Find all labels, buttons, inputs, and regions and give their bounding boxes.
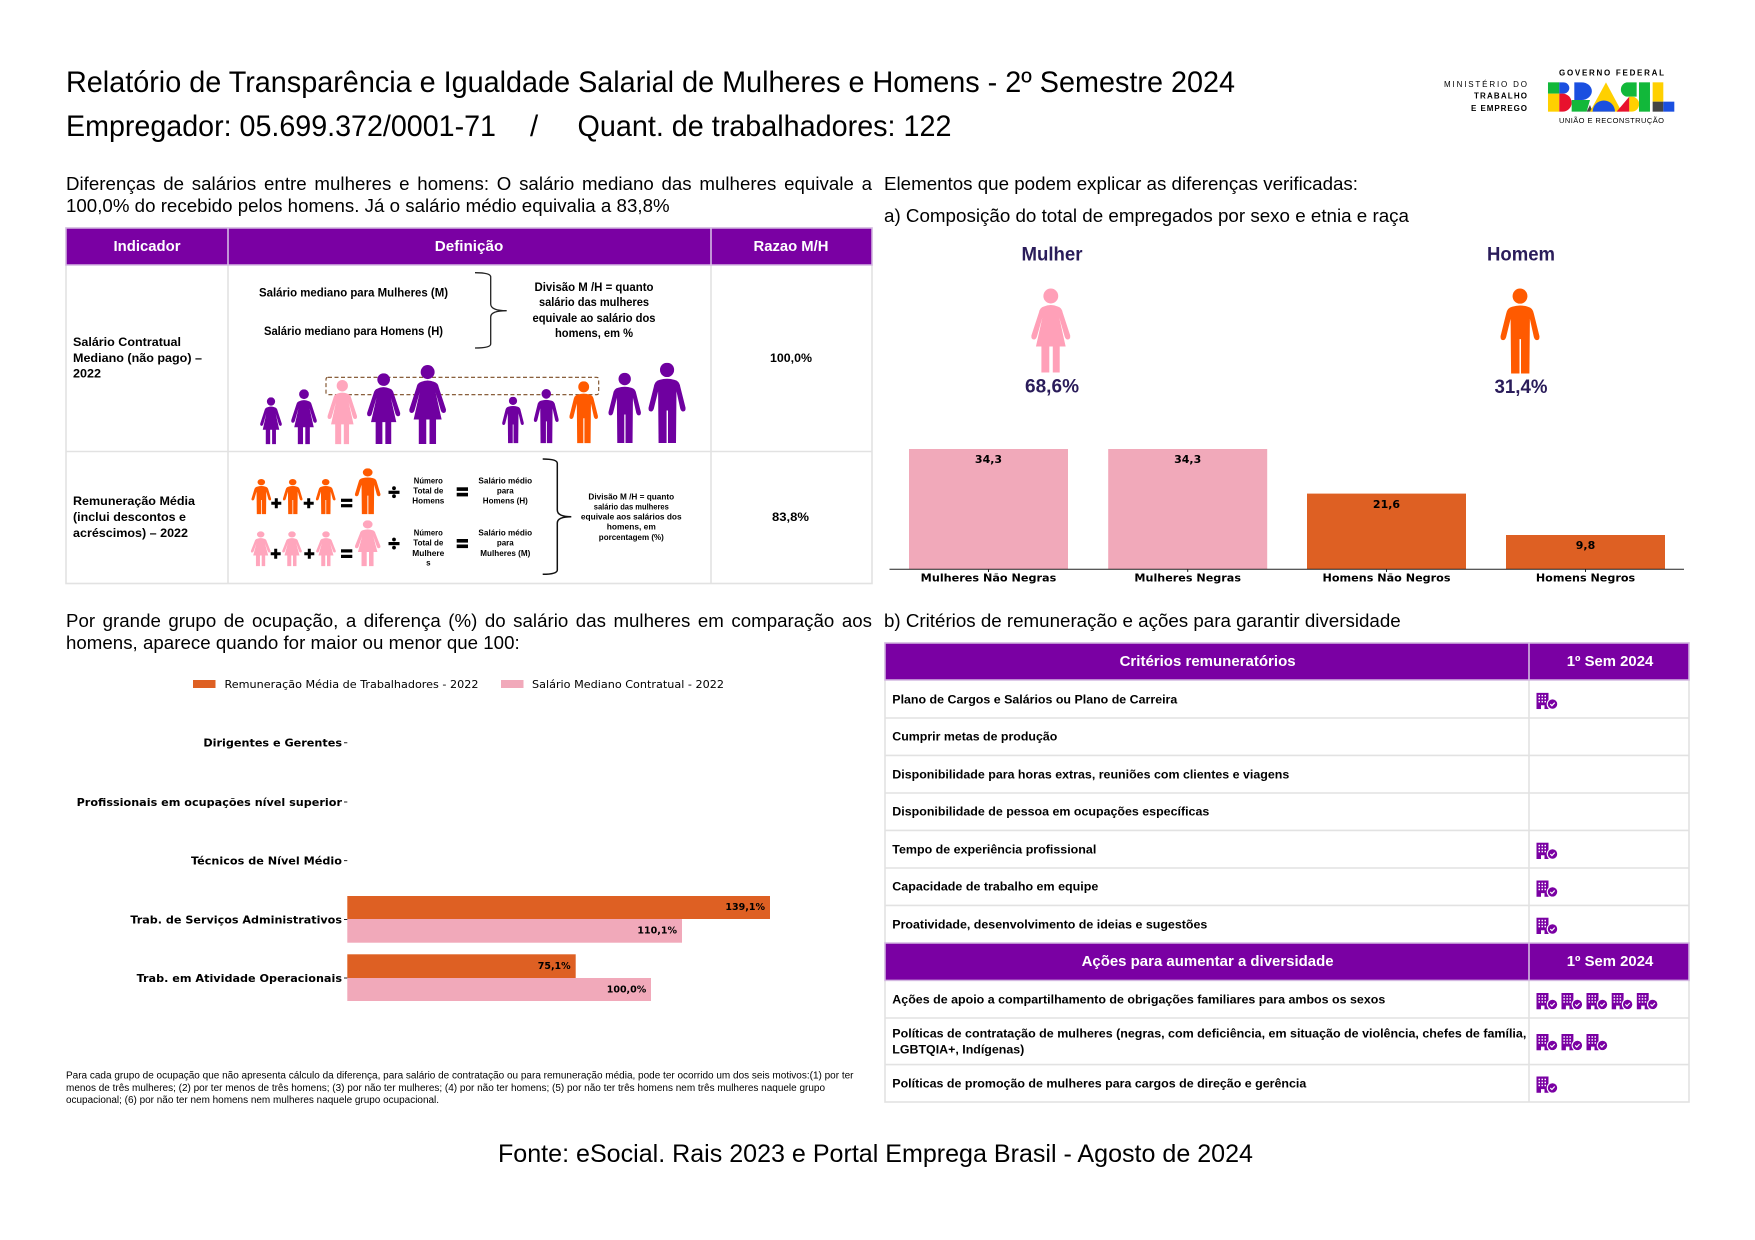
panel: critérios e ações table: Proatividade, desenvolvimento de ideias e sugestões: [892, 918, 1208, 932]
panel: indicator table: homens, em: [607, 523, 656, 532]
bar chart: composição por etnia e raça: 34,3: [975, 453, 1002, 466]
panel: critérios e ações table: Disponibilidade para horas extras, reuniões com clientes e viagens: [892, 768, 1290, 782]
legend: Salário Mediano Contratual - 2022: [532, 679, 724, 691]
panel: indicator table: Mediano (não pago) –: [73, 351, 202, 365]
bar chart: diferença por ocupação: 110,1%: [637, 926, 677, 937]
bar chart: diferença por ocupação: 139,1%: [725, 902, 765, 913]
panel: critérios e ações table: Cumprir metas de produção: [892, 730, 1057, 744]
panel: indicator table: Divisão M /H = quanto: [534, 280, 654, 294]
bar chart: diferença por ocupação: Dirigentes e Gerentes: [203, 738, 342, 750]
panel: indicator table: salário das mulheres: [594, 502, 669, 511]
legend: Remuneração Média de Trabalhadores - 2022: [224, 679, 478, 691]
panel: critérios e ações table: Ações de apoio a compartilhamento de obrigações familiares para ambos os sexos: [892, 992, 1386, 1006]
panel: indicator table: Indicador: [114, 239, 181, 255]
panel: indicator table: equivale aos salários dos: [581, 513, 682, 522]
right section heading: [884, 173, 1410, 226]
bar chart: composição por etnia e raça: Homens Negros: [1536, 572, 1636, 585]
panel: indicator table: (inclui descontos e: [73, 510, 186, 524]
bar chart: composição por etnia e raça: 34,3: [1174, 453, 1201, 466]
title: /: [530, 110, 539, 143]
panel: indicator table: Remuneração Média: [73, 494, 195, 508]
footnote: [66, 1070, 854, 1106]
legend: [193, 679, 724, 691]
panel: indicator table: s: [426, 559, 431, 568]
source line: Fonte: eSocial. Rais 2023 e Portal Emprega Brasil - Agosto de 2024: [498, 1140, 1253, 1168]
panel: critérios e ações table: Tempo de experiência profissional: [892, 842, 1096, 856]
panel: indicator table: 83,8%: [772, 510, 809, 524]
bar chart: diferença por ocupação: Trab. de Serviços Administrativos: [130, 914, 342, 926]
panel: indicator table: Total de: [413, 539, 444, 548]
bar chart: diferença por ocupação: Profissionais em ocupações nível superior: [77, 797, 343, 809]
text block: diferenças de salários: Diferenças de salários entre mulheres e homens: O salário mediano das mulheres equivale a 100,0% do recebido pelos homens. Já o salário médio equivalia a 83,8%: [66, 172, 872, 216]
panel: indicator table: para: [497, 486, 514, 496]
logo: ministério e governo federal: MINISTÉRIO DO: [1444, 80, 1527, 89]
bar chart: composição por etnia e raça: [890, 449, 1684, 585]
right section heading: Elementos que podem explicar as diferenças verificadas:: [884, 173, 1358, 194]
footnote: menos de três mulheres; (2) por ter menos de três homens; (3) por não ter mulheres; (4) por não ter homens; (5) por não ter três homens nem três mulheres naquele grupo: [66, 1083, 825, 1094]
bar chart: composição por etnia e raça: Homens Não Negros: [1322, 572, 1451, 585]
panel: critérios e ações table: 1º Sem 2024: [1567, 654, 1653, 670]
bar chart: composição por etnia e raça: Mulheres Negras: [1134, 572, 1241, 585]
panel: indicator table: Salário mediano para Homens (H): [264, 324, 443, 338]
bar chart: composição por etnia e raça: 21,6: [1373, 498, 1400, 511]
panel: critérios e ações table: Ações para aumentar a diversidade: [1082, 954, 1334, 970]
logo: ministério e governo federal: [1444, 68, 1674, 125]
bar chart: diferença por ocupação: Técnicos de Nível Médio: [191, 856, 342, 868]
logo: ministério e governo federal: TRABALHO: [1474, 92, 1527, 101]
panel: critérios e ações table: Capacidade de trabalho em equipe: [892, 880, 1099, 894]
panel: composição por sexo: 68,6%: [1025, 376, 1079, 398]
panel: indicator table: salário das mulheres: [539, 295, 649, 309]
panel: indicator table: Mulheres (M): [480, 549, 531, 558]
panel: indicator table: Total de: [413, 486, 444, 496]
panel: critérios e ações table: LGBTQIA+, Indígenas): [892, 1043, 1024, 1057]
panel: critérios e ações table: Plano de Cargos e Salários ou Plano de Carreira: [892, 692, 1178, 706]
panel: critérios e ações table: Políticas de contratação de mulheres (negras, com deficiência, em situação de violência, chefes de família,: [892, 1027, 1526, 1041]
bar chart: diferença por ocupação: 75,1%: [538, 961, 571, 972]
logo: ministério e governo federal: GOVERNO FEDERAL: [1559, 68, 1664, 77]
panel: indicator table: Salário Contratual: [73, 335, 181, 349]
panel: critérios e ações table: [885, 643, 1689, 1102]
panel: indicator table: Salário médio: [478, 477, 532, 486]
title: Quant. de trabalhadores: 122: [578, 110, 952, 143]
panel: indicator table: Salário médio: [478, 529, 532, 538]
panel: indicator table: Homens: [412, 497, 445, 506]
panel: indicator table: Definição: [435, 239, 503, 255]
bar chart: diferença por ocupação: Trab. em Atividade Operacionais: [137, 973, 342, 985]
panel: indicator table: homens, em %: [555, 326, 633, 340]
panel: indicator table: Homens (H): [483, 497, 528, 506]
title: Relatório de Transparência e Igualdade Salarial de Mulheres e Homens - 2º Semestre 2024: [66, 66, 1235, 99]
panel: indicator table: Número: [414, 529, 443, 538]
bar chart: composição por etnia e raça: Mulheres Não Negras: [921, 572, 1057, 585]
panel: critérios e ações table: 1º Sem 2024: [1567, 954, 1653, 970]
panel: indicator table: Salário mediano para Mulheres (M): [259, 286, 448, 300]
bar chart: diferença por ocupação: [77, 738, 770, 1001]
panel: composição por sexo: Homem: [1487, 245, 1555, 266]
panel: composição por sexo: [1022, 245, 1555, 398]
title: [66, 66, 1235, 143]
panel: composição por sexo: 31,4%: [1494, 377, 1548, 398]
panel: indicator table: porcentagem (%): [599, 533, 664, 542]
bar chart: composição por etnia e raça: 9,8: [1576, 539, 1595, 552]
text block: grande grupo de ocupação: Por grande grupo de ocupação, a diferença (%) do salário das mulheres em comparação aos homens, aparece quando for maior ou menor que 100:: [66, 610, 872, 652]
footnote: Para cada grupo de ocupação que não apresenta cálculo da diferença, para salário de contratação ou para remuneração média, pode ter ocorrido um dos seis motivos:(1) por ter: [66, 1070, 854, 1081]
panel: indicator table: [66, 228, 872, 584]
title: Empregador: 05.699.372/0001-71: [66, 110, 496, 143]
panel: indicator table: 100,0%: [770, 351, 812, 365]
panel: composição por sexo: Mulher: [1022, 245, 1083, 266]
panel: indicator table: Número: [414, 477, 443, 486]
panel: indicator table: equivale ao salário dos: [532, 311, 656, 325]
panel: indicator table: acréscimos) – 2022: [73, 526, 188, 540]
panel: indicator table: Razao M/H: [754, 239, 828, 255]
logo: ministério e governo federal: E EMPREGO: [1471, 104, 1527, 113]
panel: indicator table: Divisão M /H = quanto: [588, 493, 674, 502]
footnote: ocupacional; (6) por não ter nem homens nem mulheres naquele grupo ocupacional.: [66, 1095, 439, 1106]
panel: indicator table: Mulhere: [412, 549, 445, 558]
panel: indicator table: para: [497, 539, 514, 548]
logo: ministério e governo federal: UNIÃO E RECONSTRUÇÃO: [1559, 116, 1664, 125]
panel: indicator table: 2022: [73, 366, 101, 380]
bar chart: diferença por ocupação: 100,0%: [607, 984, 647, 995]
panel: critérios e ações table: Critérios remuneratórios: [1120, 654, 1296, 670]
heading: critérios de remuneração: b) Critérios de remuneração e ações para garantir diversidade: [884, 610, 1401, 631]
panel: critérios e ações table: Políticas de promoção de mulheres para cargos de direção e gerência: [892, 1077, 1307, 1091]
panel: critérios e ações table: Disponibilidade de pessoa em ocupações específicas: [892, 805, 1210, 819]
right section heading: a) Composição do total de empregados por sexo e etnia e raça: [884, 205, 1410, 226]
